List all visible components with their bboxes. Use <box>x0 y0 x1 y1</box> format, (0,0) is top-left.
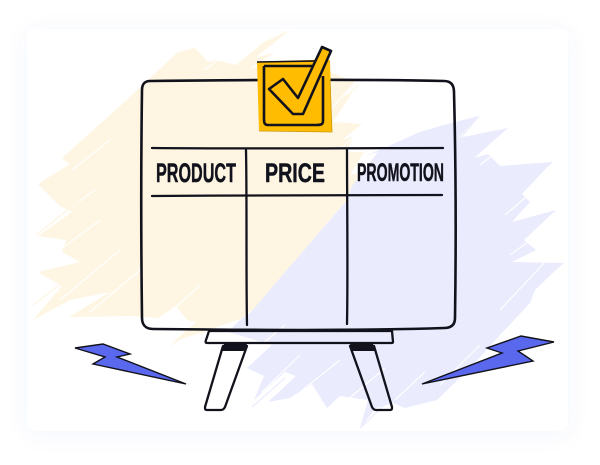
column label: price: PRICE <box>265 158 325 188</box>
sticky square <box>257 60 332 132</box>
ledge <box>206 331 393 343</box>
left leg shadow <box>222 344 247 351</box>
board <box>141 80 456 330</box>
right leg <box>350 346 392 410</box>
easel stand <box>205 331 393 410</box>
board outline <box>141 80 456 330</box>
check mark <box>269 47 331 114</box>
purple brush stroke <box>228 116 563 428</box>
icon: yellow checkbox <box>257 47 332 132</box>
icon: left lightning bolt <box>75 344 186 384</box>
column label: product: PRODUCT <box>156 158 236 188</box>
card background <box>27 29 568 431</box>
table grid <box>152 148 443 325</box>
yellow brush stroke <box>33 30 366 345</box>
icon: right lightning bolt <box>422 336 554 384</box>
right leg shadow <box>350 344 375 351</box>
left leg <box>205 346 247 410</box>
column label: promotion: PROMOTION <box>357 159 444 187</box>
